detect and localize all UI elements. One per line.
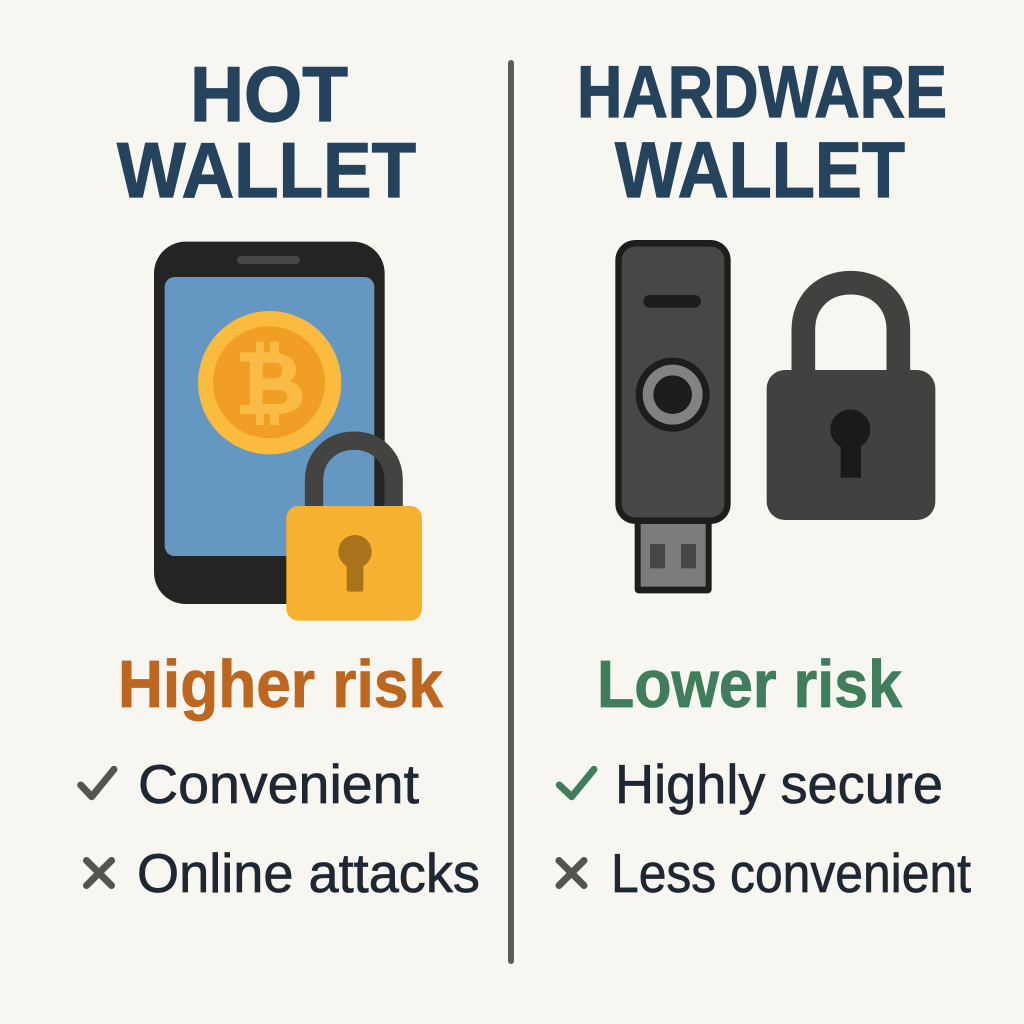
gold padlock [286,441,422,621]
phone body [154,242,385,604]
phone speaker [237,256,300,264]
usb body [615,240,731,524]
heading: hardware wallet: WALLET [615,125,905,214]
list item: convenient: Convenient [138,753,419,815]
phone screen [165,277,374,556]
heading: hot wallet: HOT [190,50,348,138]
center divider [508,60,514,964]
list item: online attacks: Online attacks [137,842,480,904]
label: higher risk: Higher risk [118,647,444,722]
dark padlock [767,283,935,520]
list item: highly secure: Highly secure [615,753,943,815]
heading: hardware wallet: HARDWARE [577,52,947,133]
heading: hot wallet: WALLET [117,126,416,214]
label: lower risk: Lower risk [597,647,903,722]
list item: less convenient: Less convenient [611,842,971,904]
heading: hardware wallet [577,52,947,214]
icon: bitcoin coin [198,311,341,454]
icon: usb hardware key and padlock [615,240,935,593]
panel: hot wallet [81,50,480,904]
heading: hot wallet [117,50,416,214]
usb connector [635,517,712,593]
panel: hardware wallet [559,52,971,904]
icon: phone with bitcoin and gold padlock [154,242,422,621]
